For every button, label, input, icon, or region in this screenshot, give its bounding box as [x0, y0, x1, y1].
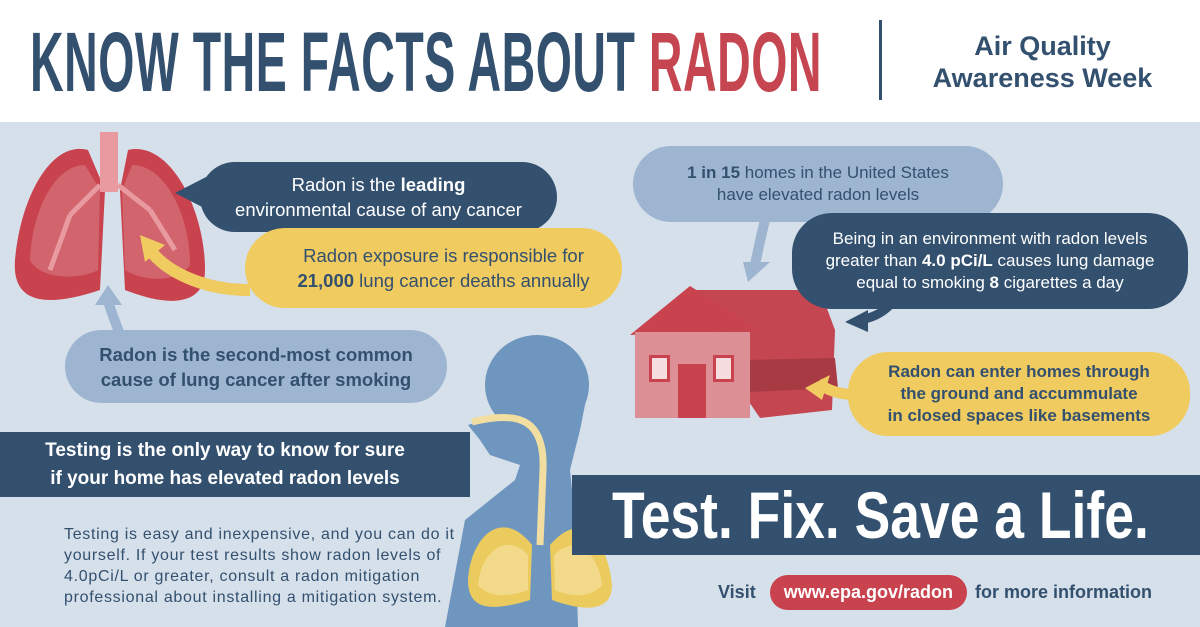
bubble: 21,000 deaths	[245, 228, 622, 308]
bubble: 4.0 pCi/L	[792, 213, 1188, 309]
bubble: 1 in 15 homes: 1 in 15 homes in the United States	[687, 163, 949, 182]
slogan text: Test. Fix. Save a Life.	[612, 478, 1149, 552]
visit line: Visit for more information	[718, 582, 1152, 602]
icon: person silhouette	[445, 335, 589, 627]
text: testing easy: yourself. If your test results show radon levels of	[64, 547, 441, 564]
band: testing	[0, 432, 470, 497]
arrow: yellow to lungs	[150, 250, 250, 290]
url pill	[770, 575, 967, 610]
text: testing easy: professional about installing a mitigation system.	[64, 589, 442, 606]
bubble: enter homes: Radon can enter homes through	[888, 362, 1150, 381]
bubble: 21,000 deaths: 21,000 lung cancer deaths annually	[297, 270, 590, 291]
subtitle: Air Quality	[974, 31, 1111, 61]
band: slogan	[572, 475, 1200, 555]
arrow: light bubble down to house	[755, 220, 765, 265]
bubble: 4.0 pCi/L: equal to smoking 8 cigarettes a day	[856, 273, 1124, 292]
bubble: second-most common: cause of lung cancer after smoking	[101, 368, 411, 390]
icon: house	[630, 286, 838, 418]
bubble: 21,000 deaths: Radon exposure is responsible for	[303, 245, 584, 266]
divider	[879, 20, 882, 100]
text: testing easy: Testing is easy and inexpensive, and you can do it	[64, 526, 455, 543]
arrow: navy to house	[860, 305, 890, 320]
bubble: 4.0 pCi/L: greater than 4.0 pCi/L causes lung damage	[826, 251, 1154, 270]
bubble: second-most common	[65, 330, 447, 403]
text: testing easy	[64, 526, 455, 606]
arrow: to lungs from navy bubble	[175, 175, 210, 211]
arrow: yellow to house	[818, 382, 860, 395]
arrow: light blue up to lungs	[108, 300, 120, 335]
bubble: second-most common: Radon is the second-most common	[99, 344, 413, 364]
band: testing: if your home has elevated radon levels	[50, 468, 400, 489]
subtitle	[933, 31, 1152, 93]
bubble: enter homes: the ground and accummulate	[900, 384, 1138, 403]
bubble: leading cause	[200, 162, 557, 232]
subtitle: Awareness Week	[933, 63, 1152, 93]
text: testing easy: 4.0pCi/L or greater, consult a radon mitigation	[64, 568, 420, 585]
visit line	[718, 575, 1152, 610]
icon: red lungs	[15, 132, 205, 301]
airway and yellow lungs	[468, 417, 612, 608]
bubble: 1 in 15 homes	[633, 146, 1003, 222]
bubble: 1 in 15 homes: have elevated radon levels	[717, 185, 919, 204]
header band	[0, 0, 1200, 122]
title: KNOW THE FACTS ABOUT RADON	[30, 15, 822, 109]
url pill: www.epa.gov/radon	[784, 582, 953, 602]
bubble: 4.0 pCi/L: Being in an environment with radon levels	[833, 229, 1147, 248]
bubble: enter homes: in closed spaces like basements	[888, 406, 1150, 425]
band: testing: Testing is the only way to know for sure	[45, 440, 405, 461]
bubble: enter homes	[848, 352, 1190, 436]
bubble: leading cause: environmental cause of any cancer	[235, 199, 522, 220]
bubble: leading cause: Radon is the leading	[292, 174, 465, 195]
